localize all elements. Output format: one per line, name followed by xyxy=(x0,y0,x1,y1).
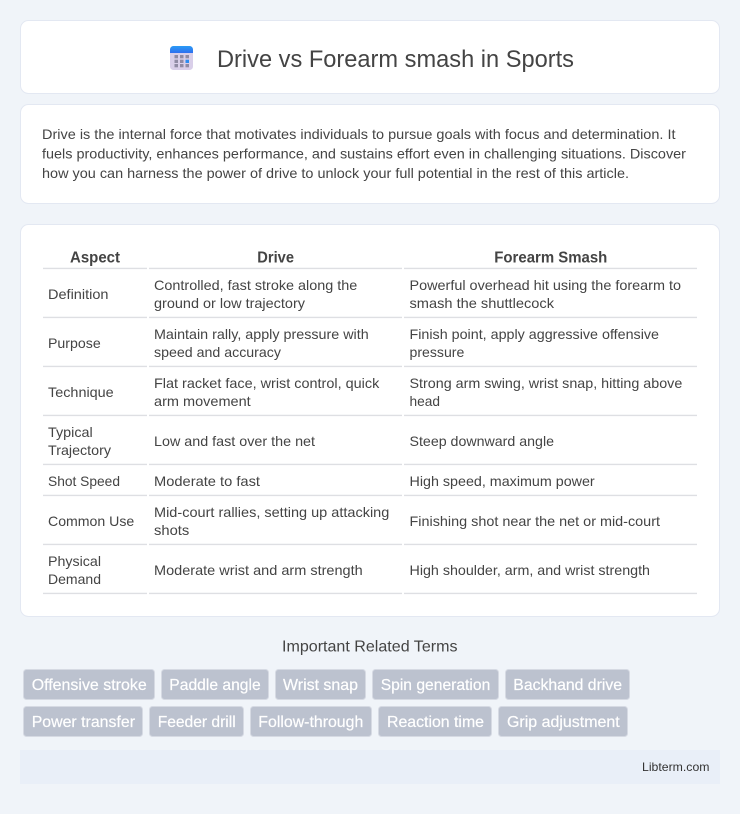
row: technique: head xyxy=(410,393,440,409)
related term tags: Spin generation xyxy=(381,677,490,694)
related term tags: Paddle angle xyxy=(169,677,261,694)
footer: Libterm.com xyxy=(642,760,710,774)
related term tags: Power transfer xyxy=(32,714,136,731)
row: purpose xyxy=(48,326,659,360)
table header row: Aspect xyxy=(70,250,121,266)
row: physical demand: Moderate wrist and arm strength xyxy=(154,562,363,578)
row: purpose: speed and accuracy xyxy=(154,344,281,360)
row: physical demand: Physical xyxy=(48,553,101,569)
row: definition: ground or low trajectory xyxy=(154,295,305,311)
related term tags: Backhand drive xyxy=(513,677,622,694)
row: common use: Finishing shot near the net or mid-court xyxy=(410,513,660,529)
row: common use: Common Use xyxy=(48,513,135,529)
related term tags xyxy=(24,670,630,736)
row: shot speed: High speed, maximum power xyxy=(410,473,595,489)
panel: comparison table xyxy=(20,224,720,616)
related term tags: Grip adjustment xyxy=(507,714,620,731)
related term tags: Wrist snap xyxy=(283,677,358,694)
row: shot speed: Moderate to fast xyxy=(154,473,260,489)
row: definition: Controlled, fast stroke along the xyxy=(154,277,358,293)
row: physical demand xyxy=(48,553,650,587)
row: purpose: Finish point, apply aggressive offensive xyxy=(410,326,659,342)
row: typical trajectory xyxy=(48,424,554,458)
table header row xyxy=(70,250,607,266)
row: common use: Mid-court rallies, setting up attacking xyxy=(154,504,389,520)
table header row: Drive xyxy=(257,250,294,266)
row: physical demand: Demand xyxy=(48,571,101,587)
text block: intro: fuels productivity, enhances performance, and sustains effort even in challenging situations. Discover xyxy=(42,146,686,162)
text block: intro xyxy=(42,126,686,181)
row: technique xyxy=(48,375,683,409)
row: definition: smash the shuttlecock xyxy=(410,295,555,311)
heading: important related terms: Important Related Terms xyxy=(282,638,458,656)
row: purpose: pressure xyxy=(410,344,465,360)
row: common use xyxy=(48,504,660,538)
text block: intro: how you can harness the power of drive to unlock your full potential in the rest of this article. xyxy=(42,165,629,181)
row: shot speed: Shot Speed xyxy=(48,473,120,489)
related term tags: Feeder drill xyxy=(158,714,236,731)
footer xyxy=(20,750,720,784)
related term tags: Offensive stroke xyxy=(32,677,147,694)
row: purpose: Maintain rally, apply pressure with xyxy=(154,326,369,342)
row: typical trajectory: Low and fast over the net xyxy=(154,433,315,449)
row: technique: Technique xyxy=(48,384,114,400)
row: common use: shots xyxy=(154,522,189,538)
row: definition: Definition xyxy=(48,286,108,302)
row: technique: Flat racket face, wrist control, quick xyxy=(154,375,380,391)
row: typical trajectory: Trajectory xyxy=(48,442,111,458)
panel: title header xyxy=(20,20,720,94)
panel: intro paragraph xyxy=(20,104,720,204)
row: typical trajectory: Steep downward angle xyxy=(410,433,554,449)
row: physical demand: High shoulder, arm, and wrist strength xyxy=(410,562,650,578)
row: technique: arm movement xyxy=(154,393,251,409)
related term tags: Follow-through xyxy=(258,714,363,731)
title: Drive vs Forearm smash in Sports xyxy=(217,46,574,73)
row: shot speed xyxy=(48,473,595,489)
text block: intro: Drive is the internal force that motivates individuals to pursue goals with focus and determination. It xyxy=(42,126,676,142)
table header row: Forearm Smash xyxy=(494,250,607,266)
row: typical trajectory: Typical xyxy=(48,424,93,440)
row: definition: Powerful overhead hit using the forearm to xyxy=(410,277,681,293)
row: definition xyxy=(48,277,681,311)
related term tags: Reaction time xyxy=(387,714,484,731)
icon: calendar xyxy=(170,46,193,70)
row: purpose: Purpose xyxy=(48,335,101,351)
row: technique: Strong arm swing, wrist snap, hitting above xyxy=(410,375,683,391)
